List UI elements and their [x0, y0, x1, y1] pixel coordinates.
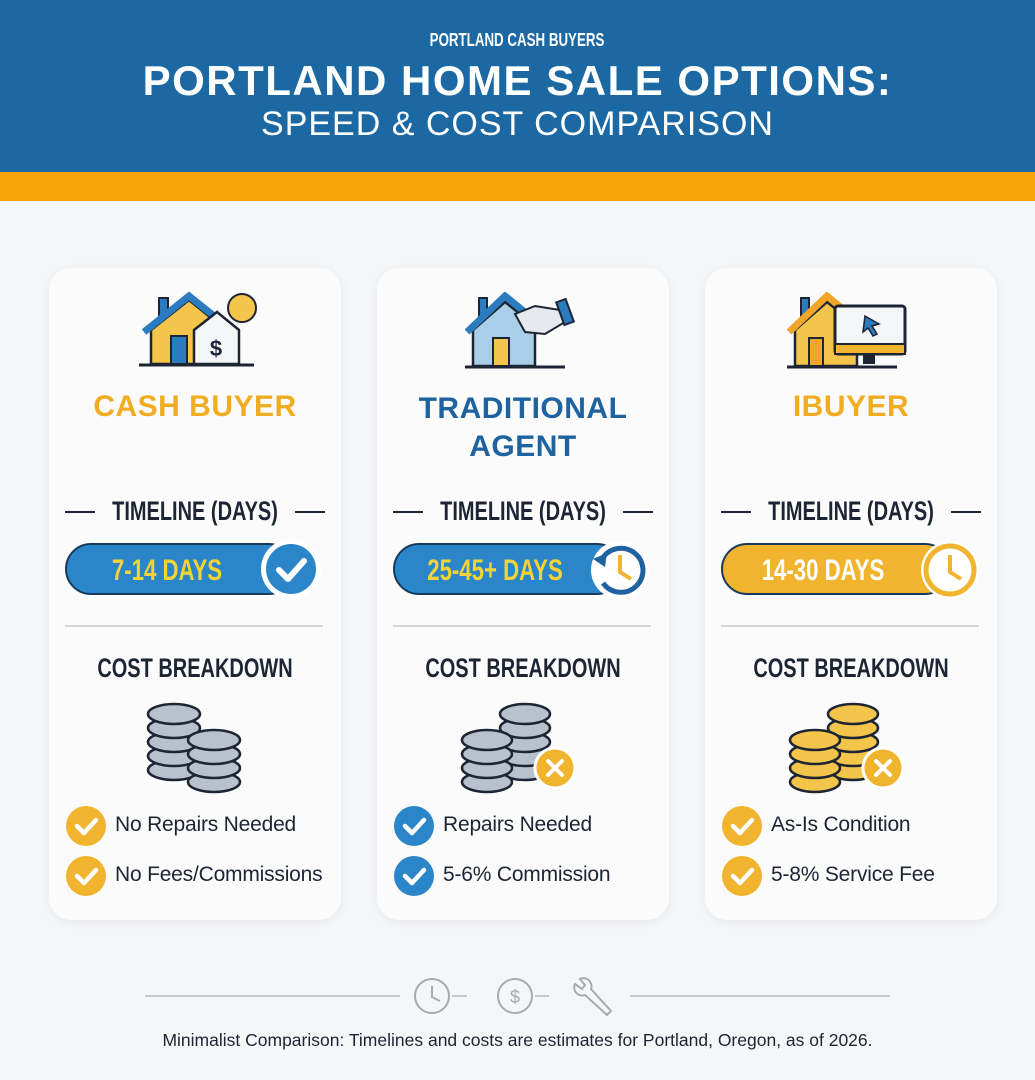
heading: IBUYER: [793, 390, 909, 423]
heading: [418, 392, 627, 463]
title: PORTLAND HOME SALE OPTIONS:: [143, 57, 892, 104]
bullet: commission: [394, 856, 610, 896]
panel: cash buyer: [49, 268, 341, 920]
cost heading: COST BREAKDOWN: [753, 653, 949, 683]
bullet: repairs needed: [394, 806, 592, 846]
footer icons row: [145, 977, 890, 1016]
icon: check badge: [261, 544, 316, 594]
heading: CASH BUYER: [93, 390, 297, 423]
panel: ibuyer: [705, 268, 997, 920]
orange accent band: [0, 172, 1035, 201]
panel: traditional agent: 5-6% Commission: [443, 863, 610, 886]
panel: cash buyer: No Repairs Needed: [115, 813, 296, 836]
icon: gold coins with x: [788, 702, 902, 794]
cost heading: COST BREAKDOWN: [425, 653, 621, 683]
cost heading: COST BREAKDOWN: [97, 653, 293, 683]
heading: TRADITIONAL: [419, 392, 627, 425]
header band: [0, 0, 1035, 172]
footnote: Minimalist Comparison: Timelines and costs are estimates for Portland, Oregon, as of 2026.: [162, 1030, 873, 1050]
timeline pill: 14-30 DAYS: [762, 554, 884, 587]
subtitle: SPEED & COST COMPARISON: [261, 105, 774, 143]
panel: traditional agent: Repairs Needed: [443, 813, 592, 836]
bullet: as-is: [722, 806, 910, 846]
timeline pill: [65, 543, 295, 595]
bullet: service fee: [722, 856, 935, 896]
footer icons row: $: [510, 987, 520, 1007]
bullet: no fees: [66, 856, 322, 896]
panel: ibuyer: 5-8% Service Fee: [771, 863, 935, 886]
panel: ibuyer: As-Is Condition: [771, 813, 910, 836]
panel: traditional agent: [377, 268, 669, 920]
panel: cash buyer: No Fees/Commissions: [115, 863, 322, 886]
timeline pill: 7-14 DAYS: [112, 554, 222, 587]
timeline pill: [393, 543, 623, 595]
timeline label: TIMELINE (DAYS): [768, 496, 934, 526]
icon: house with dollar: $: [210, 336, 222, 361]
timeline pill: [721, 543, 951, 595]
icon: coins: [146, 702, 242, 794]
icon: coins with x: [460, 702, 574, 794]
icon: clock: [921, 544, 976, 596]
timeline label: TIMELINE (DAYS): [440, 496, 606, 526]
icon: house with monitor: [787, 292, 906, 368]
timeline label: TIMELINE (DAYS): [112, 496, 278, 526]
icon: house with handshake: [465, 292, 575, 368]
bullet: no repairs: [66, 806, 296, 846]
icon: house with dollar: [139, 292, 257, 366]
brand label: PORTLAND CASH BUYERS: [430, 30, 605, 50]
timeline pill: 25-45+ DAYS: [427, 554, 563, 587]
icon: clock with arrow: [591, 544, 646, 595]
heading: AGENT: [469, 430, 577, 463]
